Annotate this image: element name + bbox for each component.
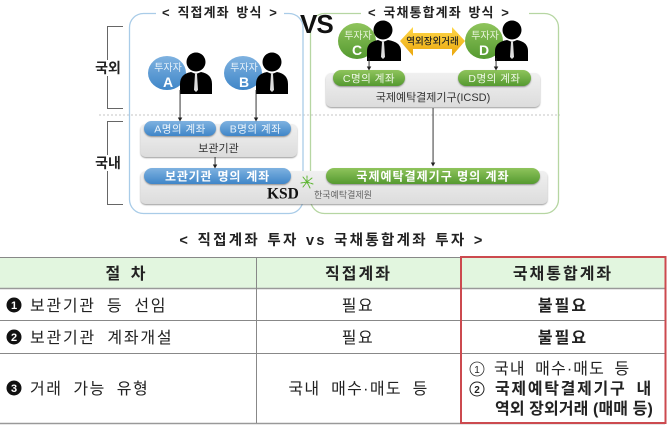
KSD logo: 한국예탁결제원 — [314, 189, 372, 200]
investor A: 투자자 — [154, 62, 182, 74]
row 3 global: 역외 장외거래 (매매 등) — [495, 400, 653, 418]
account pills: D — [458, 70, 531, 86]
account pills: A: A명의 계좌 — [154, 124, 206, 136]
ICSD box — [326, 73, 540, 107]
row 2 direct: 필요 — [342, 329, 374, 347]
ICSD name account — [326, 168, 540, 184]
row 3 label: 3 — [11, 383, 17, 395]
investor C: C — [352, 42, 362, 58]
heading: direct account method: < 직접계좌 방식 > — [162, 5, 278, 20]
double arrow: offshore OTC trading — [400, 27, 465, 56]
header: procedure: 절 차 — [106, 265, 148, 283]
dashed divider — [99, 114, 560, 116]
row 1 global: 불필요 — [538, 297, 588, 315]
row 3 global: 1 — [474, 365, 480, 376]
investor A: A — [163, 74, 173, 90]
account pills: C — [333, 70, 405, 86]
account pills: D: D명의 계좌 — [468, 73, 521, 85]
row 3 global: 2 — [474, 385, 480, 396]
account pills: A — [144, 121, 216, 136]
highlight box: global account column — [461, 257, 666, 423]
row 1 label: 1 — [11, 300, 17, 312]
custodian name account: 보관기관 명의 계좌 — [165, 168, 270, 184]
investor D: 투자자 — [471, 30, 499, 42]
heading: global custody method: < 국채통합계좌 방식 > — [368, 5, 510, 20]
bracket: domestic — [94, 122, 123, 204]
icon: KSD star — [301, 176, 313, 188]
row 2 label: 보관기관 계좌개설 — [30, 329, 173, 347]
bracket: overseas — [94, 26, 123, 108]
panel: direct account method — [130, 5, 303, 214]
comparison table — [0, 257, 665, 424]
row 1 direct: 필요 — [342, 297, 374, 315]
custodian box — [140, 124, 297, 157]
KSD box — [140, 171, 548, 204]
ICSD name account: 국제예탁결제기구 명의 계좌 — [356, 168, 510, 184]
KSD logo — [267, 176, 372, 202]
VS label: VS — [300, 9, 333, 39]
account pills: B: B명의 계좌 — [230, 124, 281, 136]
table header row — [0, 257, 665, 288]
investor C — [338, 20, 401, 61]
investor D — [465, 20, 528, 61]
KSD logo: KSD — [267, 186, 299, 202]
row 2 label: 2 — [11, 332, 17, 344]
row 3 global: 국제예탁결제기구 내 — [495, 380, 653, 398]
ICSD label: 국제예탁결제기구(ICSD) — [376, 91, 490, 104]
custodian label: 보관기관 — [198, 142, 239, 155]
header: global account: 국채통합계좌 — [513, 265, 613, 283]
table heading: < 직접계좌 투자 vs 국채통합계좌 투자 > — [179, 232, 485, 249]
label: domestic: 국내 — [95, 155, 121, 171]
label: overseas: 국외 — [95, 60, 121, 76]
custodian name account — [144, 168, 291, 184]
row 2 global: 불필요 — [538, 329, 588, 347]
investor D: D — [479, 42, 489, 58]
double arrow: offshore OTC trading: 역외장외거래 — [406, 36, 459, 48]
investor A — [148, 52, 212, 94]
row 3 direct: 국내 매수·매도 등 — [288, 380, 429, 398]
row 1 label: 보관기관 등 선임 — [30, 297, 167, 315]
account pills: C: C명의 계좌 — [343, 73, 395, 85]
row 3 label: 거래 가능 유형 — [30, 380, 149, 398]
account pills: B — [220, 121, 291, 136]
row 3 global — [470, 360, 653, 418]
investor B: 투자자 — [230, 62, 258, 74]
investor B — [224, 52, 288, 94]
header: direct account: 직접계좌 — [325, 265, 392, 283]
panel: global custody account method — [310, 5, 558, 214]
row 3 global: 국내 매수·매도 등 — [494, 360, 630, 378]
investor C: 투자자 — [344, 30, 372, 42]
arrows — [178, 58, 498, 168]
investor B: B — [239, 74, 249, 90]
